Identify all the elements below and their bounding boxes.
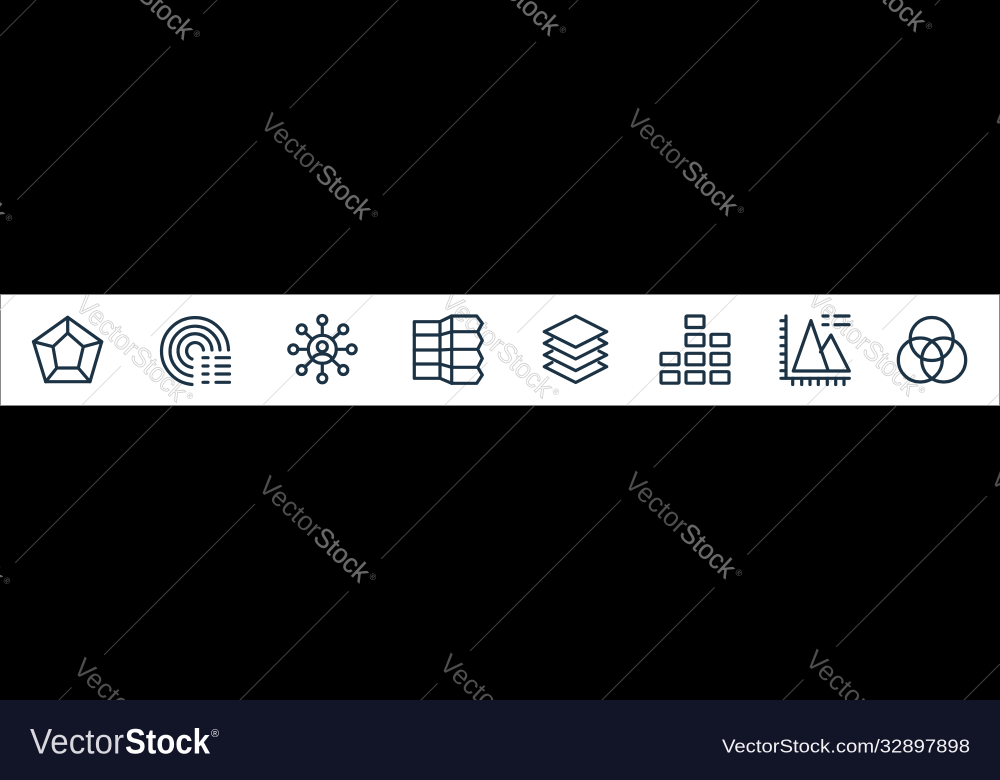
icon: stacked layers xyxy=(544,316,607,382)
watermark 2: ® xyxy=(557,24,569,36)
icon: radar pentagon xyxy=(34,317,102,382)
watermark 8 xyxy=(0,451,27,607)
watermark 3 xyxy=(786,0,949,52)
watermark 8: ® xyxy=(1,575,13,587)
footer bar xyxy=(0,700,1000,780)
watermark 5: Stock xyxy=(310,159,378,225)
watermark 1 xyxy=(54,0,217,60)
watermark 9 xyxy=(230,447,393,603)
band watermark 2: Stock xyxy=(491,337,559,403)
icon: venn diagram xyxy=(898,318,966,382)
watermark 10: ® xyxy=(733,567,745,579)
band watermark 1 xyxy=(79,295,194,404)
watermark 10: Stock xyxy=(674,518,742,584)
footer logo xyxy=(30,722,219,762)
footer image id: VectorStock.com/32897898 xyxy=(722,736,970,757)
watermark 10: Vector xyxy=(619,466,694,540)
watermark 5 xyxy=(232,84,395,240)
footer logo: ® xyxy=(211,728,219,740)
icon: mountain area chart xyxy=(781,316,849,384)
white icon band xyxy=(0,294,1000,406)
band watermark 2: Vector xyxy=(436,285,511,359)
watermark 12: Vector xyxy=(68,652,143,726)
icon: person network hub xyxy=(289,316,356,383)
band watermark 2: ® xyxy=(550,386,562,398)
band watermark 3: Stock xyxy=(857,335,925,401)
watermark 6: Vector xyxy=(621,103,696,177)
watermark 5: Vector xyxy=(255,107,330,181)
watermark 6: ® xyxy=(735,204,747,216)
watermark 7 xyxy=(964,76,1000,232)
band watermark 1: Vector xyxy=(70,289,145,363)
watermark 14: Vector xyxy=(800,644,875,718)
watermark 6 xyxy=(598,80,761,236)
watermark 13: Vector xyxy=(434,648,509,722)
watermark 6: Stock xyxy=(676,155,744,221)
watermark 5: ® xyxy=(369,208,381,220)
footer logo: Stock xyxy=(125,722,210,762)
footer logo: Vector xyxy=(30,722,124,762)
watermark 3: ® xyxy=(923,20,935,32)
watermark 12 xyxy=(45,629,208,780)
watermark 2 xyxy=(420,0,583,56)
watermark 13 xyxy=(411,625,574,780)
icon: concentric arc chart with legend xyxy=(162,318,230,384)
watermark 1: ® xyxy=(191,28,203,40)
band watermark 3: Vector xyxy=(802,283,877,357)
watermark 11 xyxy=(962,439,1000,595)
watermark 9: Vector xyxy=(253,470,328,544)
watermark 4 xyxy=(0,88,29,244)
band watermark 3: ® xyxy=(916,384,928,396)
band watermark lines xyxy=(0,295,999,405)
watermark 9: Stock xyxy=(308,522,376,588)
watermark 9: ® xyxy=(367,571,379,583)
band watermarks xyxy=(79,295,926,404)
icon: brick bar chart xyxy=(661,316,729,383)
band watermark 1: Stock xyxy=(125,341,193,407)
watermark 10 xyxy=(596,443,759,599)
band watermark 1: ® xyxy=(184,390,196,402)
icon: folded table xyxy=(414,316,482,383)
band watermark 2 xyxy=(445,295,560,400)
watermark 4: ® xyxy=(3,212,15,224)
band watermark 3 xyxy=(811,295,926,398)
watermark 14 xyxy=(777,621,940,777)
